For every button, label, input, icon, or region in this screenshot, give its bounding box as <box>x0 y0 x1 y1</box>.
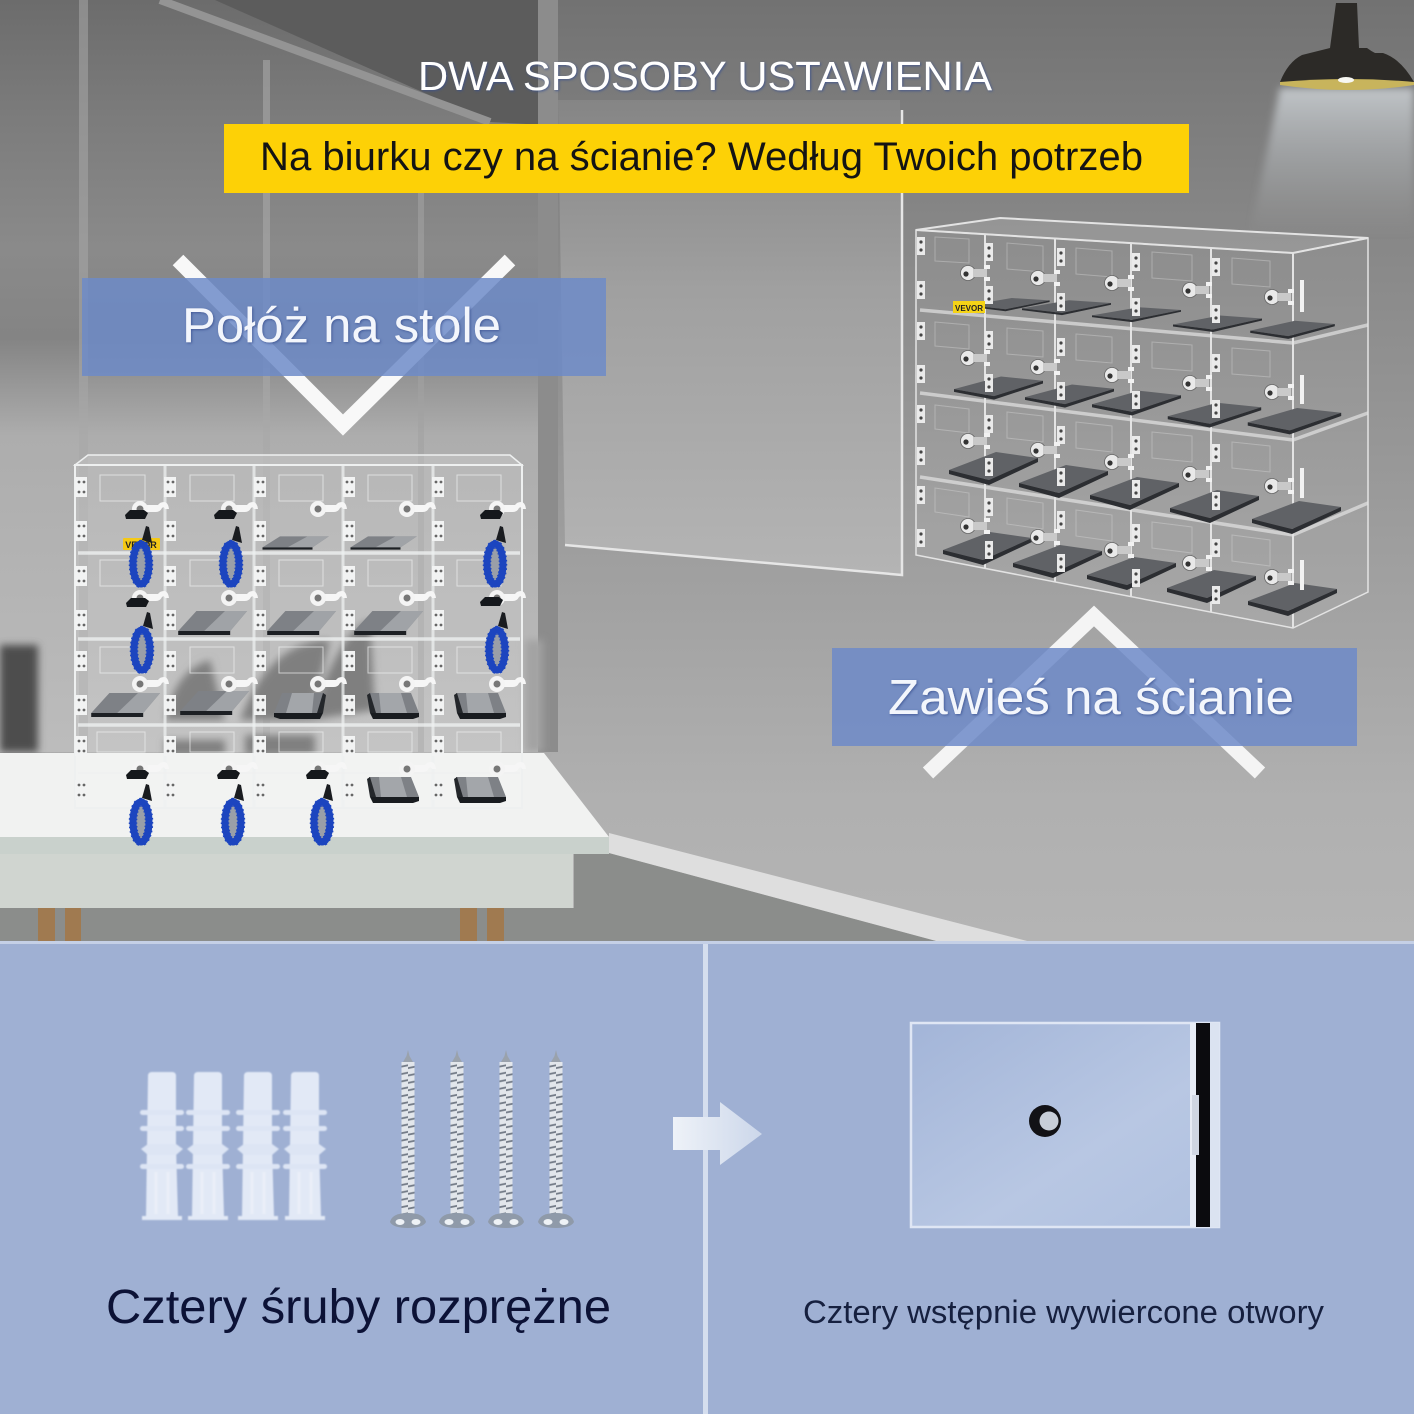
chevron behind right label <box>928 616 1260 773</box>
acrylic cabinet on table <box>75 455 526 842</box>
label: put on table: Połóż na stole <box>182 299 501 353</box>
background: office photo <box>0 0 1414 942</box>
arrow <box>673 1102 762 1165</box>
hinges <box>75 477 444 800</box>
phones on shelves <box>91 536 506 803</box>
table <box>0 753 609 941</box>
hinges <box>917 237 1220 604</box>
label: hang on wall: Zawieś na ścianie <box>888 671 1294 725</box>
label: put on table <box>82 278 606 376</box>
window area left <box>0 0 558 752</box>
wall plugs <box>140 1072 327 1220</box>
yellow subtitle banner <box>224 124 1189 193</box>
baseboard <box>609 833 1031 942</box>
caption: pre-drilled holes: Cztery wstępnie wywiercone otwory <box>803 1294 1324 1330</box>
pendant lamp <box>1250 3 1414 235</box>
screws <box>390 1050 574 1228</box>
title: DWA SPOSOBY USTAWIENIA <box>418 53 993 99</box>
acrylic sheet with hole <box>911 1023 1219 1227</box>
cabinet frame <box>75 455 522 808</box>
blurred clouds and furniture behind the cabinet <box>0 620 543 755</box>
acrylic cabinet on wall <box>916 218 1368 628</box>
blue coil key straps <box>133 526 508 842</box>
VEVOR sticker: VEVOR <box>125 540 157 550</box>
black key caps <box>125 510 503 779</box>
VEVOR sticker <box>953 301 985 313</box>
bottom panel <box>0 941 1414 1414</box>
VEVOR sticker: VEVOR <box>955 304 983 313</box>
floor <box>0 853 940 942</box>
chevron behind left label <box>178 260 510 425</box>
latch bars <box>1300 280 1304 590</box>
caption: expansion screws: Cztery śruby rozprężne <box>106 1281 611 1334</box>
whiteboard on wall <box>558 100 902 575</box>
devices on shelves <box>943 298 1341 616</box>
locks <box>132 501 526 777</box>
locks <box>960 265 1294 585</box>
label: hang on wall <box>832 648 1357 746</box>
cabinet frame <box>916 218 1368 628</box>
yellow subtitle banner: Na biurku czy na ścianie? Według Twoich potrzeb <box>260 135 1143 179</box>
